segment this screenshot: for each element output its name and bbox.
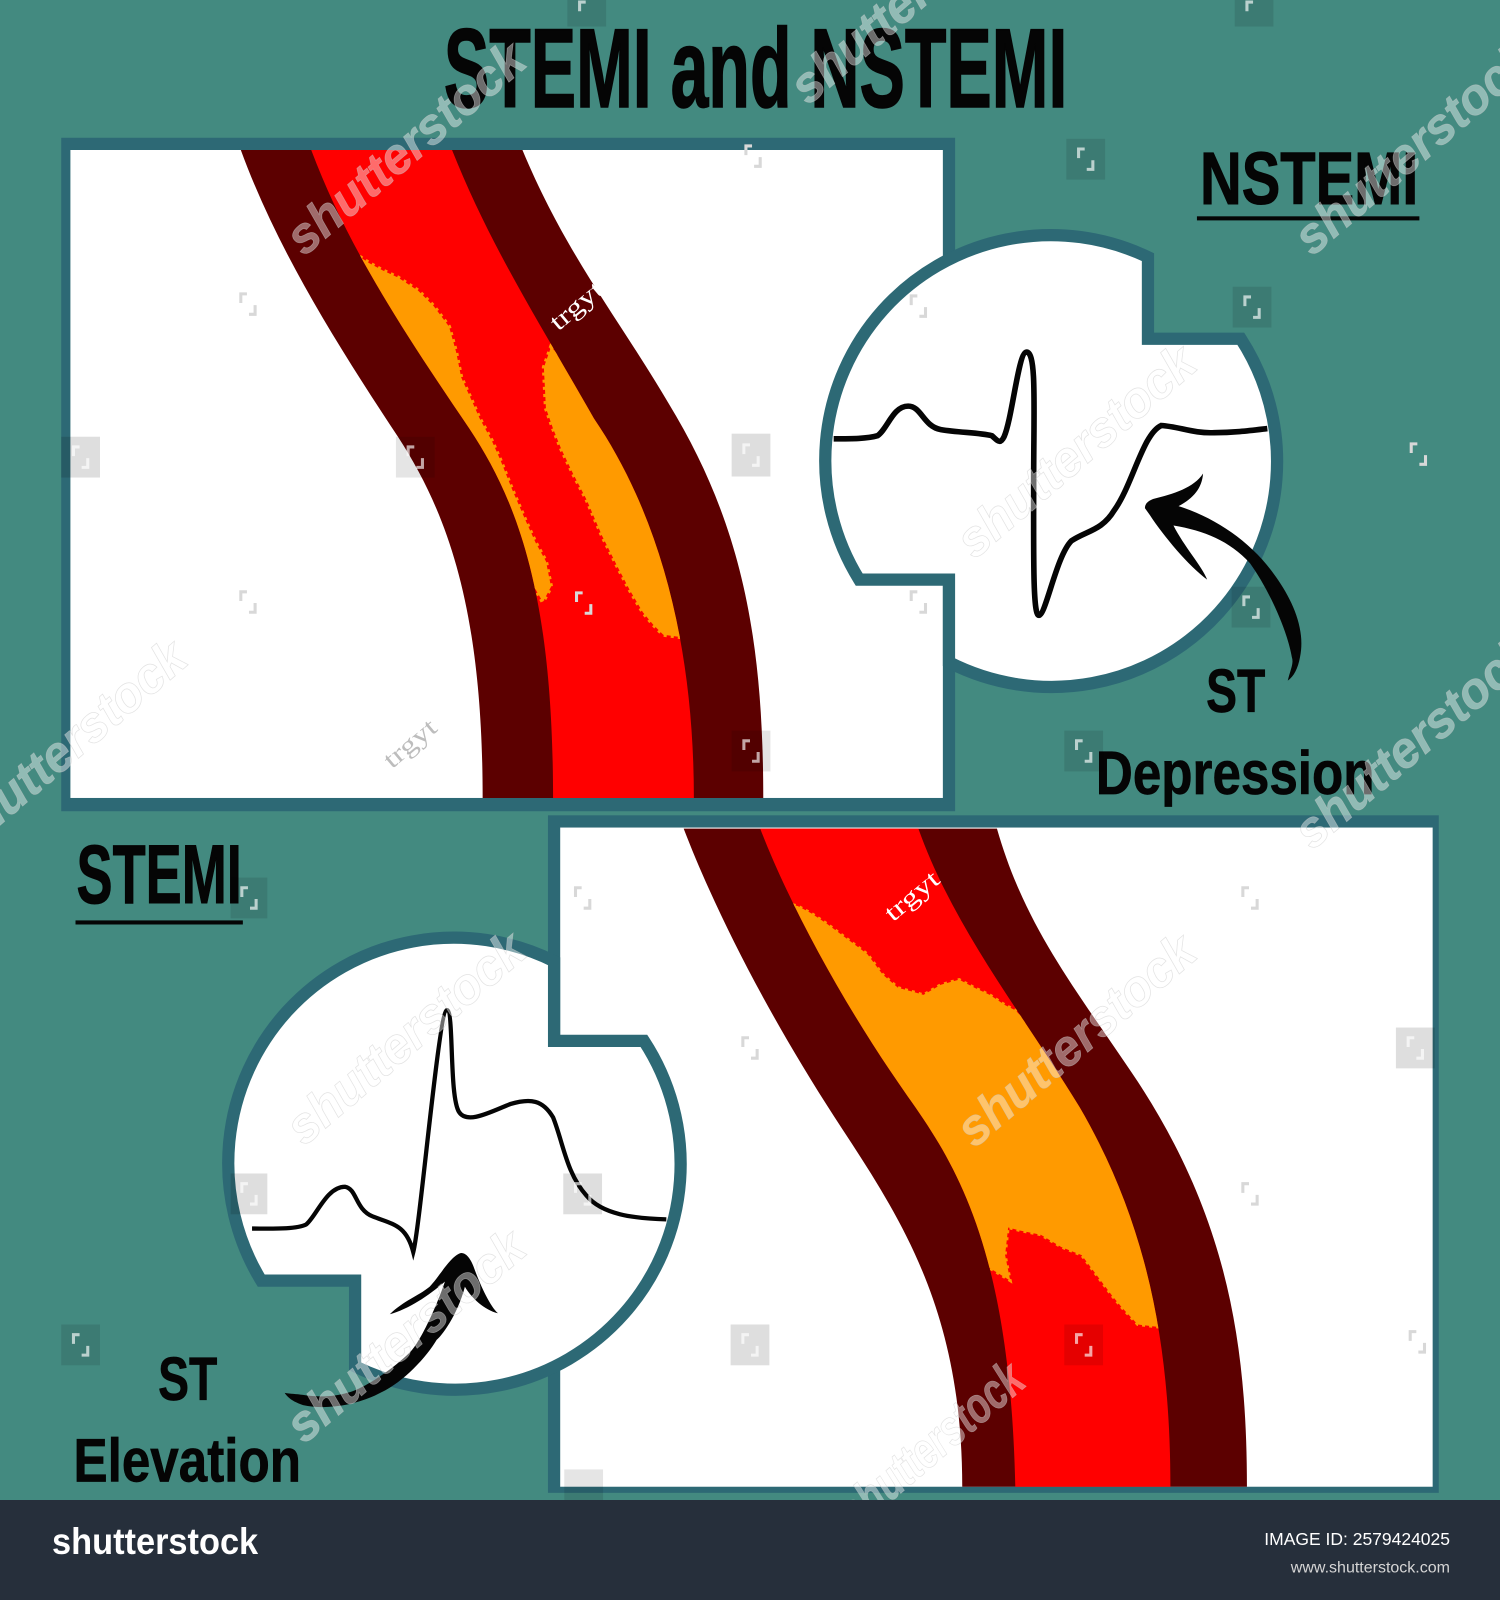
watermarks: shutterstock xyxy=(827,1349,1036,1539)
small labels: trgyt: trgyt xyxy=(543,275,609,336)
heading: STEMI xyxy=(76,827,243,924)
label: ST Elevation xyxy=(73,1345,301,1495)
ECG bubble: NSTEMI xyxy=(825,235,1277,687)
watermarks: shutterstock xyxy=(274,918,538,1155)
small labels: trgyt: trgyt xyxy=(878,864,945,927)
footer bar xyxy=(0,1500,1500,1600)
title: STEMI and NSTEMI xyxy=(444,5,1067,131)
panel: NSTEMI artery xyxy=(61,138,955,811)
arrow: to ST elevation xyxy=(285,1253,498,1407)
ECG bubble: STEMI xyxy=(228,938,681,1390)
label: ST Depression: ST xyxy=(1206,657,1265,725)
artery wall xyxy=(241,150,763,798)
watermarks: shutterstock xyxy=(945,920,1209,1157)
small labels: trgyt xyxy=(377,275,945,927)
heading: NSTEMI: NSTEMI xyxy=(1200,137,1418,220)
occluding plaque xyxy=(793,903,1158,1328)
image id: IMAGE ID: 2579424025 xyxy=(1264,1529,1450,1549)
watermarks: shutterstock xyxy=(945,331,1209,569)
watermarks: shutterstock xyxy=(274,28,538,266)
arrow: to ST depression xyxy=(1145,473,1301,681)
artery lumen xyxy=(311,150,694,798)
small labels: trgyt: trgyt xyxy=(377,712,443,774)
watermarks: shutterstock xyxy=(274,1216,538,1453)
heading: STEMI: STEMI xyxy=(77,827,242,921)
label: ST Depression: Depression xyxy=(1096,739,1374,807)
footer logo text: shutterstock xyxy=(52,1521,259,1562)
panel: STEMI artery xyxy=(548,815,1439,1493)
artery wall xyxy=(684,829,1247,1487)
ECG trace: ST depression xyxy=(834,352,1267,615)
ECG trace: ST elevation xyxy=(252,1010,666,1252)
label: ST Elevation: Elevation xyxy=(73,1427,301,1495)
plaque deposits xyxy=(360,255,680,639)
site url: www.shutterstock.com xyxy=(1290,1559,1450,1576)
label: ST Depression xyxy=(1096,657,1374,807)
artery lumen xyxy=(760,829,1170,1487)
label: ST Elevation: ST xyxy=(158,1345,217,1413)
